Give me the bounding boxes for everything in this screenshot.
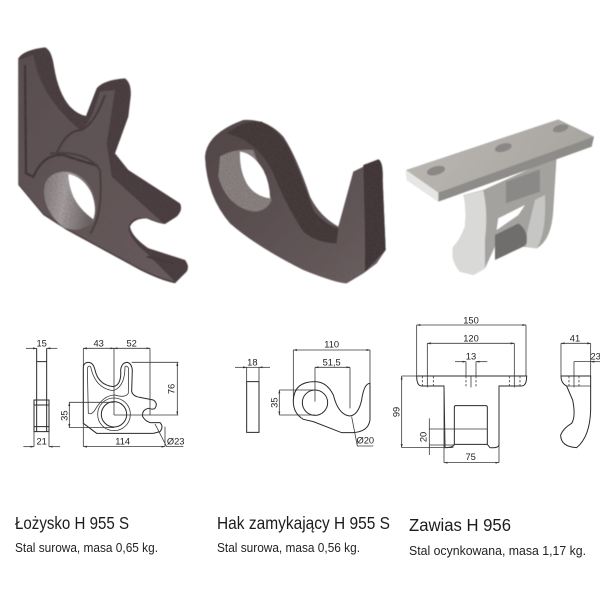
- side view of bearing: [23, 339, 60, 447]
- front view of bearing: Ø23: [167, 436, 184, 446]
- front view of bearing: 76: [166, 384, 176, 394]
- caption: hinge: Zawias H 956: [409, 515, 511, 535]
- front view of hook: 110: [324, 340, 339, 350]
- caption: hinge: [409, 515, 586, 558]
- drawing: hinge dimensions: [392, 315, 600, 463]
- side view of bearing: 15: [36, 339, 47, 349]
- front view of hinge: 150: [463, 315, 479, 325]
- caption: hinge: Stal ocynkowana, masa 1,17 kg.: [409, 543, 586, 558]
- side view of hook: 18: [247, 358, 258, 368]
- front view of hook: 35: [270, 397, 280, 408]
- caption: bearing: Łożysko H 955 S: [15, 513, 129, 533]
- caption: closing hook: [217, 513, 390, 555]
- caption: bearing: Stal surowa, masa 0,65 kg.: [15, 540, 158, 555]
- caption: closing hook: Hak zamykający H 955 S: [217, 513, 390, 533]
- front view of hinge: 99: [392, 407, 402, 417]
- drawing: hook dimensions: [235, 340, 374, 446]
- photo: bearing H 955 S: [18, 47, 188, 283]
- front view of hook: [270, 340, 374, 446]
- front view of bearing: 52: [126, 339, 137, 349]
- front view of bearing: [60, 339, 184, 447]
- side view of bearing: 21: [36, 436, 47, 446]
- photo: hinge H 956: [406, 119, 594, 275]
- front view of bearing: 43: [93, 339, 104, 349]
- front view of hinge: 13: [466, 351, 476, 361]
- front view of hinge: 20: [418, 432, 428, 442]
- front view of hinge: [392, 315, 527, 463]
- caption: bearing: [15, 513, 158, 555]
- caption: closing hook: Stal surowa, masa 0,56 kg.: [217, 540, 360, 555]
- hook hole: [240, 152, 270, 198]
- side view of hinge: 41: [570, 333, 580, 343]
- front view of hook: Ø20: [356, 435, 374, 445]
- front view of hook: 51,5: [323, 357, 341, 367]
- bearing hole: [68, 174, 95, 219]
- front view of bearing: 35: [60, 410, 70, 421]
- drawing: bearing dimensions: [23, 339, 184, 447]
- photo: closing hook H 955 S: [205, 120, 386, 283]
- side view of hinge: [561, 333, 600, 448]
- front view of hinge: 120: [463, 333, 479, 343]
- front view of hinge: 75: [465, 452, 476, 462]
- front view of bearing: 114: [115, 436, 130, 446]
